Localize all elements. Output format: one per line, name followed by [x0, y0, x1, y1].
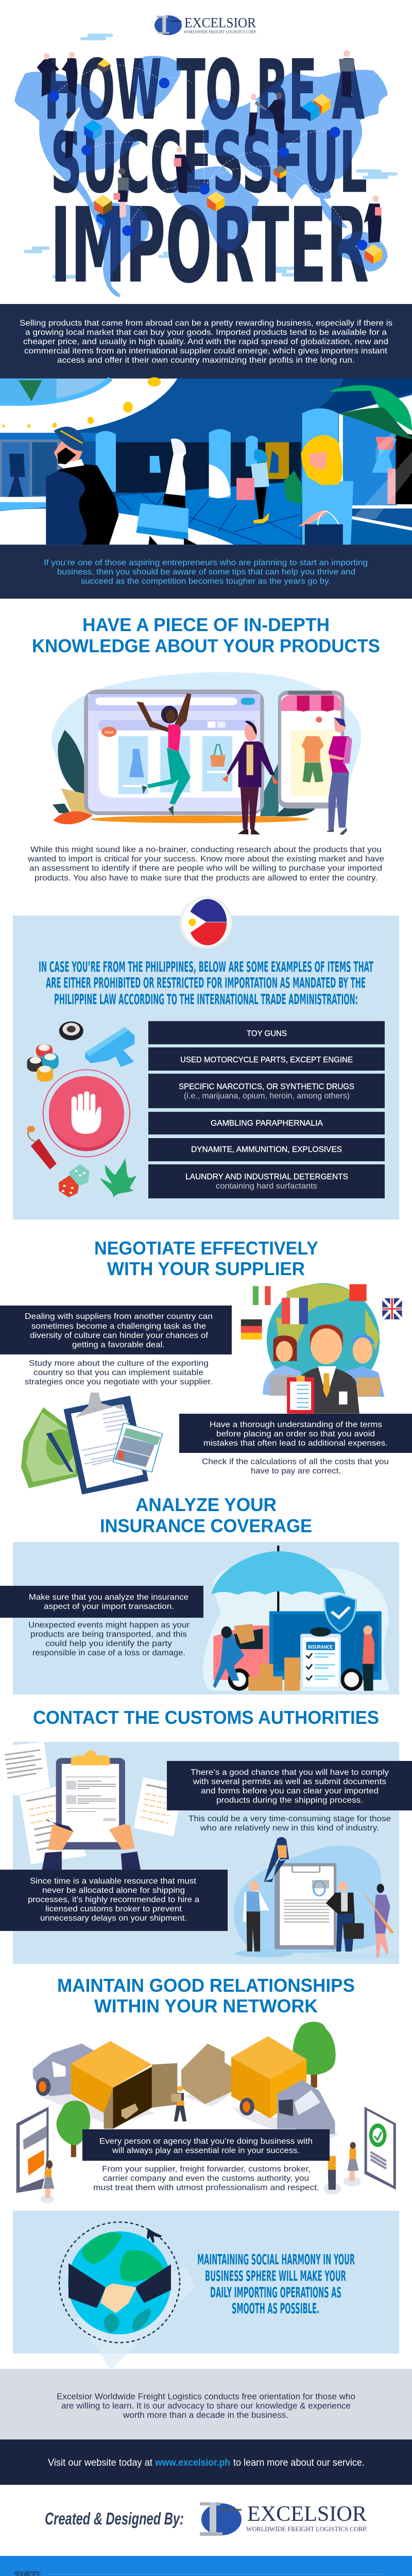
illustration: online shop: [51, 672, 361, 835]
world map: [14, 56, 388, 297]
text: product research: wanted to import is critical for your success. Know more about the existing market and have: [27, 855, 384, 863]
intro paragraph: access and offer it their own country maximizing their profits in the long run.: [57, 356, 355, 365]
callout: understand the terms: before placing an order so that you avoid: [216, 1430, 375, 1438]
light beam: [77, 2267, 196, 2370]
heading: negotiate: WITH YOUR SUPPLIER: [107, 1258, 305, 1279]
leaves: [58, 730, 87, 803]
callout: essential role: will always play an essential role in your success.: [112, 2146, 300, 2155]
item: explosives: DYNAMITE, AMMUNITION, EXPLOSIVES: [191, 1145, 342, 1154]
panel: Philippine prohibited items: [13, 896, 399, 1219]
panel: insurance: [0, 1542, 399, 1694]
clouds: [24, 33, 397, 279]
text: professionalism: From your supplier, freight forwarder, customs broker,: [102, 2165, 311, 2174]
item list: [148, 1021, 385, 1198]
panel: social harmony: [13, 2211, 399, 2370]
item: detergents: LAUNDRY AND INDUSTRIAL DETERGENTS: [185, 1173, 348, 1181]
illustration: logistics network: [16, 2022, 396, 2204]
text: study the culture: [25, 1359, 213, 1386]
product cards: [118, 736, 148, 794]
illustration: reviewing documents: [234, 1837, 400, 1959]
credit: created and designed by: EXCELSIOR: [247, 2502, 367, 2526]
callout: dealing with suppliers: sometimes become a challenging task as the: [31, 1322, 206, 1331]
panel: free orientation: Excelsior Worldwide Freight Logistics conducts free orientation for those who: [57, 2392, 355, 2401]
icon: dice: [59, 1164, 89, 1197]
logo: Excelsior header: WORLDWIDE FREIGHT LOGISTICS CORP.: [184, 30, 256, 34]
icon: toy gun: [85, 1027, 134, 1067]
globe: [68, 2231, 171, 2334]
callout: analyze the insurance: Make sure that you analyze the insurance: [29, 1593, 188, 1602]
blonde shopper: [298, 435, 353, 545]
isometric cargo boxes: [84, 59, 382, 264]
item: explosives: [148, 1138, 385, 1161]
text: unexpected events: responsible in case of a loss or damage.: [32, 1649, 185, 1657]
callout: essential role: Every person or agency that you’re doing business with: [99, 2137, 313, 2146]
callout: dealing with suppliers: diversity of culture can hinder your chances of: [30, 1331, 209, 1340]
item: motorcycle parts: [148, 1047, 385, 1071]
text: professionalism: [93, 2165, 319, 2192]
floor shadow: [91, 816, 308, 823]
text: unexpected events: could help you identify the party: [45, 1639, 172, 1648]
route pins: [48, 78, 367, 250]
ceiling lamps: [2, 377, 161, 428]
heading: customs authorities: CONTACT THE CUSTOMS AUTHORITIES: [33, 1707, 379, 1728]
text: check the calculations: [202, 1458, 389, 1476]
callout: understand the terms: Have a thorough understanding of the terms: [210, 1420, 382, 1429]
logo: Excelsior header: EXCELSIOR: [184, 15, 256, 30]
callout: permits and documents: There’s a good chance that you will have to comply: [191, 1768, 389, 1777]
shopper with blue bag: [136, 438, 197, 545]
map routes, pins, boxes and people: [37, 50, 382, 264]
shop fronts: [0, 433, 115, 441]
heading: in-depth knowledge: HAVE A PIECE OF IN-DEPTH: [82, 614, 330, 635]
pillars: [96, 409, 338, 498]
world map overlap tint: [14, 56, 388, 297]
text: unexpected events: Unexpected events might happen as your: [28, 1621, 190, 1630]
callout: customs broker: licensed customs broker to prevent: [45, 1905, 182, 1913]
front tree: [57, 2100, 90, 2157]
text: study the culture: country so that you can implement suitable: [33, 1368, 203, 1377]
seated woman: [264, 1837, 289, 1882]
icon: roulette: [59, 1021, 83, 1040]
item: gambling: GAMBLING PARAPHERNALIA: [211, 1119, 323, 1128]
shadows: [40, 2081, 339, 2147]
illustration: online shop: SALE: [105, 730, 114, 734]
right shop window: [339, 395, 412, 509]
callout: permits and documents: [167, 1761, 412, 1810]
panel: website call to action: to learn more about our service.: [233, 2458, 365, 2468]
callout: understand the terms: mistakes that often lead to additional expenses.: [203, 1439, 388, 1448]
condensed heading: [39, 958, 373, 1008]
credit: created and designed by: WORLDWIDE FREIGHT LOGISTICS CORP.: [246, 2525, 367, 2533]
panel: website call to action: Visit our website today at: [48, 2458, 153, 2468]
item: narcotics: [148, 1074, 385, 1108]
call-out paragraph: succeed as the competition becomes tougher as the years go by.: [81, 577, 331, 586]
standing man left: [251, 1883, 259, 1894]
heading: relationships: WITHIN YOUR NETWORK: [94, 1995, 318, 2016]
heading: negotiate: NEGOTIATE EFFECTIVELY: [94, 1238, 318, 1259]
text: product research: While this might sound like a no-brainer, conducting research about the products that you: [30, 845, 382, 854]
logo: Excelsior header: [154, 15, 256, 35]
text: time-consuming stage: [188, 1815, 391, 1833]
text: unexpected events: [28, 1621, 190, 1657]
text: professionalism: carrier company and even the customs authority, you: [103, 2174, 309, 2183]
panel: free orientation: worth more than a decade in the business.: [123, 2410, 288, 2420]
callout: customs broker: [0, 1870, 228, 1931]
browser window: [84, 689, 264, 815]
panel: free orientation: are willing to learn. It is our advocacy to share our knowledge & experience: [61, 2401, 351, 2411]
mall floor: [115, 481, 301, 545]
panel: website call to action: [0, 2439, 412, 2485]
panel: customs authorities: [0, 1742, 412, 1964]
cardboard boxes: [181, 2044, 231, 2104]
heading: in-depth knowledge: KNOWLEDGE ABOUT YOUR PRODUCTS: [32, 635, 380, 656]
heading: insurance: [100, 1494, 312, 1536]
shopper with pink bag: [236, 449, 279, 523]
item: toy guns: TOY GUNS: [247, 1029, 287, 1038]
intro paragraph: Selling products that came from abroad can be a pretty rewarding business, especially if there is: [20, 319, 392, 328]
callout: analyze the insurance: [0, 1586, 203, 1618]
text: time-consuming stage: This could be a very time-consuming stage for those: [188, 1815, 391, 1823]
credit: created and designed by: [45, 2502, 367, 2536]
text: study the culture: Study more about the culture of the exporting: [29, 1359, 209, 1368]
callout: permits and documents: and forms before you can clear your imported: [201, 1787, 379, 1795]
title: [44, 42, 369, 306]
item: narcotics: SPECIFIC NARCOTICS, OR SYNTHETIC DRUGS: [179, 1082, 354, 1091]
business people: [37, 50, 382, 243]
text: professionalism: must treat them with utmost professionalism and respect.: [93, 2183, 319, 2192]
heading: insurance: ANALYZE YOUR: [135, 1494, 277, 1515]
callout: customs broker: never be allocated alone for shipping: [42, 1886, 185, 1895]
item: detergents: containing hard surfactants: [216, 1182, 317, 1191]
item: motorcycle parts: USED MOTORCYCLE PARTS, EXCEPT ENGINE: [180, 1056, 353, 1064]
panel: website call to action: www.excelsior.ph: [154, 2458, 230, 2468]
man in magenta shirt: [327, 717, 352, 835]
call-out paragraph: If you’re one of those aspiring entrepreneurs who are planning to start an importing: [44, 558, 368, 567]
text: product research: [27, 845, 384, 883]
item: toy guns: [148, 1021, 385, 1044]
callout: customs broker: Since time is a valuable resource that must: [30, 1877, 197, 1886]
headset woman: [263, 1335, 301, 1397]
back tree: [293, 2022, 336, 2088]
jumping woman: [136, 693, 191, 816]
intro paragraph: a growing local market that can buy your goods. Imported products tend to be available for a: [25, 328, 387, 337]
route lines: [54, 65, 347, 231]
heading: insurance: INSURANCE COVERAGE: [100, 1515, 312, 1536]
woman with pencil: [377, 1884, 384, 1893]
icon: casino chips: [27, 1044, 59, 1082]
callout: dealing with suppliers: getting a favorable deal.: [72, 1341, 165, 1349]
worker carrying parcel: [171, 2086, 186, 2122]
item: gambling: [148, 1112, 385, 1134]
condensed message: [197, 2251, 355, 2317]
left truck: [33, 2041, 177, 2129]
panel: sources footer: [0, 2556, 412, 2576]
sale badge: [101, 727, 117, 737]
callout: dealing with suppliers: [0, 1306, 232, 1354]
main businessman: [287, 1325, 359, 1414]
icons: prohibited items: [27, 1021, 136, 1197]
intro paragraph: commercial items from an international supplier could emerge, which gives importers instant: [24, 347, 388, 355]
logo emblem: [200, 2502, 242, 2536]
panel: intro: [0, 304, 412, 599]
callout: permits and documents: products during the shipping process.: [216, 1796, 363, 1805]
callout: analyze the insurance: aspect of your import transaction.: [44, 1602, 174, 1611]
man with bag: [338, 1881, 347, 1891]
plane: [147, 2228, 162, 2243]
shopping mall illustration: [0, 377, 412, 545]
callout: customs broker: processes, it’s highly recommended to hire a: [28, 1895, 199, 1904]
illustration: signing documents: [0, 1742, 184, 1870]
man in purple jacket: [222, 721, 279, 835]
text: study the culture: strategies once you negotiate with your supplier.: [25, 1378, 213, 1386]
heading: relationships: MAINTAIN GOOD RELATIONSHIPS: [57, 1975, 355, 1996]
callout: customs broker: unnecessary delays on your shipment.: [40, 1914, 187, 1923]
heading: in-depth knowledge: [32, 614, 380, 656]
callout: dealing with suppliers: Dealing with suppliers from another country can: [25, 1312, 213, 1321]
text: product research: products. You also have to make sure that the products are allowed to enter the country.: [35, 874, 377, 883]
illustration: globe handshake: [59, 2222, 196, 2370]
illustration: contract and calculator: [21, 1393, 162, 1495]
handshake: [68, 2263, 171, 2308]
text: check the calculations: have to pay are correct.: [251, 1467, 341, 1476]
logo emblem: [154, 15, 182, 35]
intro paragraph: cheaper price, and usually in high quality. And with the rapid spread of globalization, new and: [23, 337, 388, 346]
heading: negotiate: [94, 1238, 318, 1279]
credit: created and designed by: Created & Designed By:: [45, 2509, 184, 2528]
icon: stop hand: [43, 1070, 130, 1157]
icon: dynamite: [27, 1126, 57, 1170]
orbit: [59, 2222, 180, 2343]
callout: essential role: [82, 2129, 330, 2161]
delivery man: [344, 1334, 384, 1397]
callout: permits and documents: with several permits as well as submit documents: [193, 1777, 386, 1786]
text: time-consuming stage: who are relatively new in this kind of industry.: [200, 1824, 379, 1833]
illustration: global supplier team: [241, 1283, 402, 1414]
icon: Philippine flag: [180, 896, 232, 948]
text: unexpected events: products are being transported, and this: [30, 1630, 187, 1639]
text: product research: an assessment to identify if there are people who will be willing to purchase your imported: [29, 864, 382, 873]
right truck: [231, 2036, 335, 2134]
shoppers: [41, 2142, 361, 2204]
text: check the calculations: Check if the calculations of all the costs that you: [202, 1458, 389, 1466]
right tablet: [365, 2107, 396, 2190]
callout: understand the terms: [179, 1414, 412, 1453]
item: narcotics: (i.e., marijuana, opium, heroin, among others): [184, 1092, 350, 1100]
phone: [278, 690, 344, 808]
icon: cannabis leaf: [100, 1158, 136, 1197]
tropical leaves: [329, 385, 412, 431]
shopper with hat: [46, 427, 119, 545]
panel: free orientation: [0, 2369, 412, 2439]
call-out paragraph: business, then you should be aware of some tips that can help you thrive and: [57, 568, 355, 577]
label on clipboard: INSURANCE: [308, 1644, 333, 1650]
call-out paragraph: [44, 558, 368, 586]
left tablet: [16, 2107, 48, 2193]
speech flags: [241, 1284, 402, 1340]
heading: relationships: [57, 1975, 355, 2016]
illustration: insured truck: [203, 1546, 389, 1691]
intro paragraph: [20, 319, 392, 365]
item: detergents: [148, 1164, 385, 1198]
